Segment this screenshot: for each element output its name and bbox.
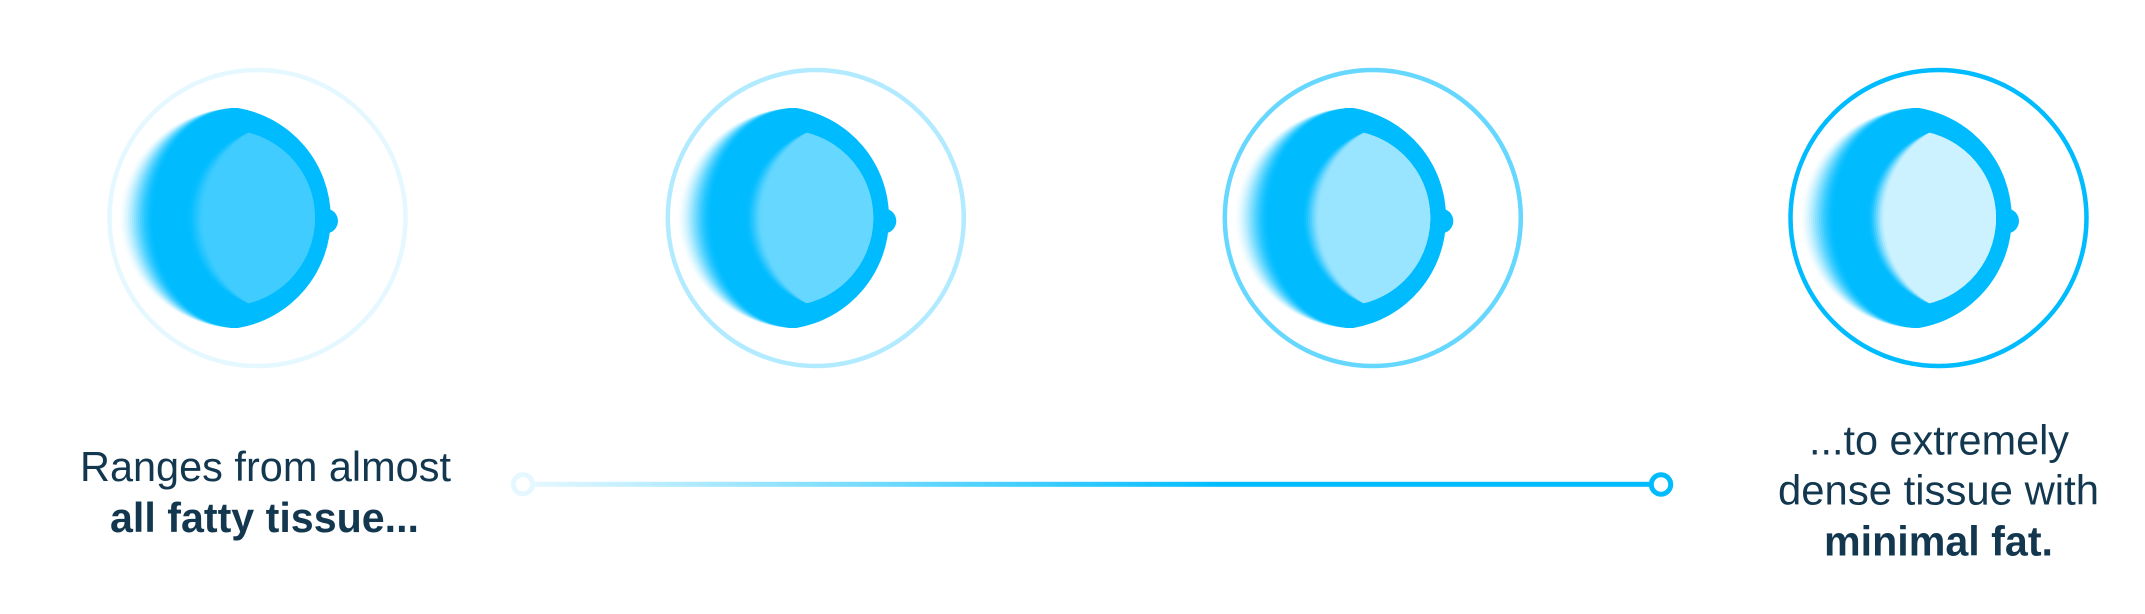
outline ring (1225, 70, 1521, 366)
diagram: breast extremely dense (1790, 70, 2086, 366)
outline ring (1790, 70, 2086, 366)
right caption (1778, 416, 2099, 565)
right caption: minimal fat. (1824, 518, 2053, 565)
density scale line with end markers (513, 475, 1671, 494)
fatty tissue area (1302, 132, 1453, 304)
dense tissue shape (1799, 108, 2019, 328)
dense tissue shape (1233, 108, 1453, 328)
left caption (80, 443, 451, 541)
dense tissue shape (676, 108, 896, 328)
diagram: breast almost all fatty (110, 70, 406, 366)
right caption: dense tissue with (1778, 467, 2099, 514)
left caption: all fatty tissue... (110, 494, 419, 541)
outline ring (668, 70, 964, 366)
outline ring (110, 70, 406, 366)
diagram: breast heterogeneously dense (1225, 70, 1521, 366)
fatty tissue area (745, 132, 896, 304)
dense tissue shape (118, 108, 338, 328)
left caption: Ranges from almost (80, 443, 451, 490)
fatty tissue area (1868, 132, 2018, 304)
fatty tissue area (187, 132, 338, 304)
right caption: ...to extremely (1809, 416, 2069, 464)
diagram: breast scattered density (668, 70, 964, 366)
